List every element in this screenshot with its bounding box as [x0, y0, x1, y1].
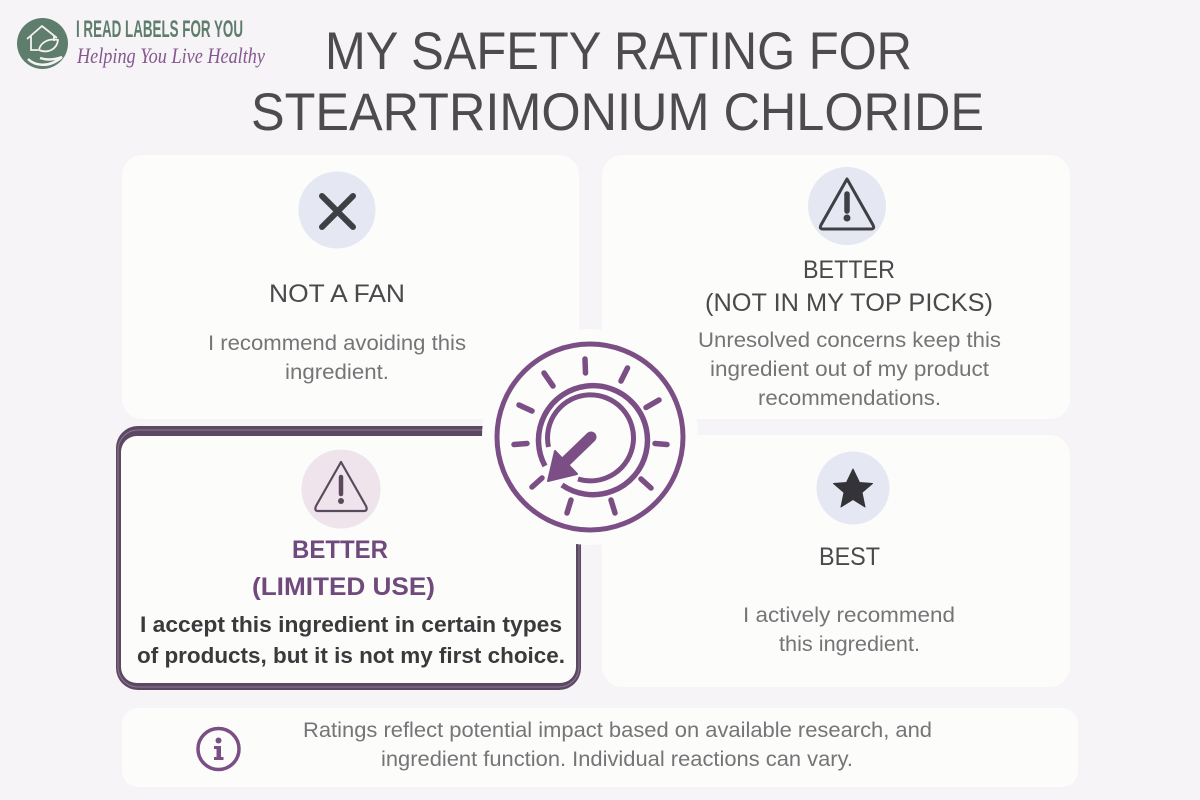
logo name: I READ LABELS FOR YOU: [76, 16, 243, 43]
logo tagline: Helping You Live Healthy: [76, 43, 265, 68]
icon: x mark: [298, 172, 376, 248]
heading: not a fan: NOT A FAN: [269, 280, 405, 308]
text: not a fan description: [208, 332, 466, 384]
text: limited use description: I accept this ingredient in certain types: [140, 612, 562, 637]
heading: better, limited use: BETTER: [292, 536, 388, 564]
dial arcs: [538, 386, 647, 495]
heading: better, limited use: [252, 536, 435, 601]
heading: better, limited use: (LIMITED USE): [252, 573, 435, 601]
text: best description: I actively recommend: [743, 604, 955, 627]
logo: [17, 16, 265, 69]
panel: not a fan: [122, 155, 579, 419]
icon: rating dial: [482, 329, 698, 545]
dial arrow: [563, 437, 591, 464]
icon: house in hand: [17, 18, 68, 69]
text: better description: recommendations.: [758, 387, 941, 410]
text: not a fan description: I recommend avoiding this: [208, 332, 466, 355]
dial ticks: [514, 359, 667, 513]
panel: footer note: [122, 708, 1078, 787]
text: better description: ingredient out of my product: [710, 358, 989, 381]
text: footer note: [303, 719, 932, 771]
icon: warning triangle: [808, 167, 886, 245]
title: STEARTRIMONIUM CHLORIDE: [251, 83, 984, 142]
heading: better, not in my top picks: BETTER: [803, 256, 895, 284]
text: best description: [743, 604, 955, 656]
title: MY SAFETY RATING FOR: [325, 22, 912, 81]
heading: better, not in my top picks: [705, 256, 993, 317]
text: footer note: ingredient function. Individual reactions can vary.: [381, 748, 853, 771]
icon: star: [816, 452, 890, 524]
text: limited use description: of products, but it is not my first choice.: [137, 643, 565, 668]
icon: info: [198, 728, 239, 770]
panel: best: [602, 435, 1070, 687]
title: [251, 22, 984, 142]
text: not a fan description: ingredient.: [285, 361, 389, 384]
panel: better, not in my top picks: [602, 155, 1070, 419]
icon: warning triangle pink: [302, 450, 380, 528]
panel: better, limited use (selected): [116, 426, 581, 690]
heading: better, not in my top picks: (NOT IN MY TOP PICKS): [705, 289, 993, 317]
text: better description: [698, 329, 1001, 410]
text: best description: this ingredient.: [779, 633, 920, 656]
heading: best: BEST: [819, 543, 880, 571]
text: better description: Unresolved concerns keep this: [698, 329, 1001, 352]
text: limited use description: [137, 612, 565, 668]
text: footer note: Ratings reflect potential impact based on available research, and: [303, 719, 932, 742]
